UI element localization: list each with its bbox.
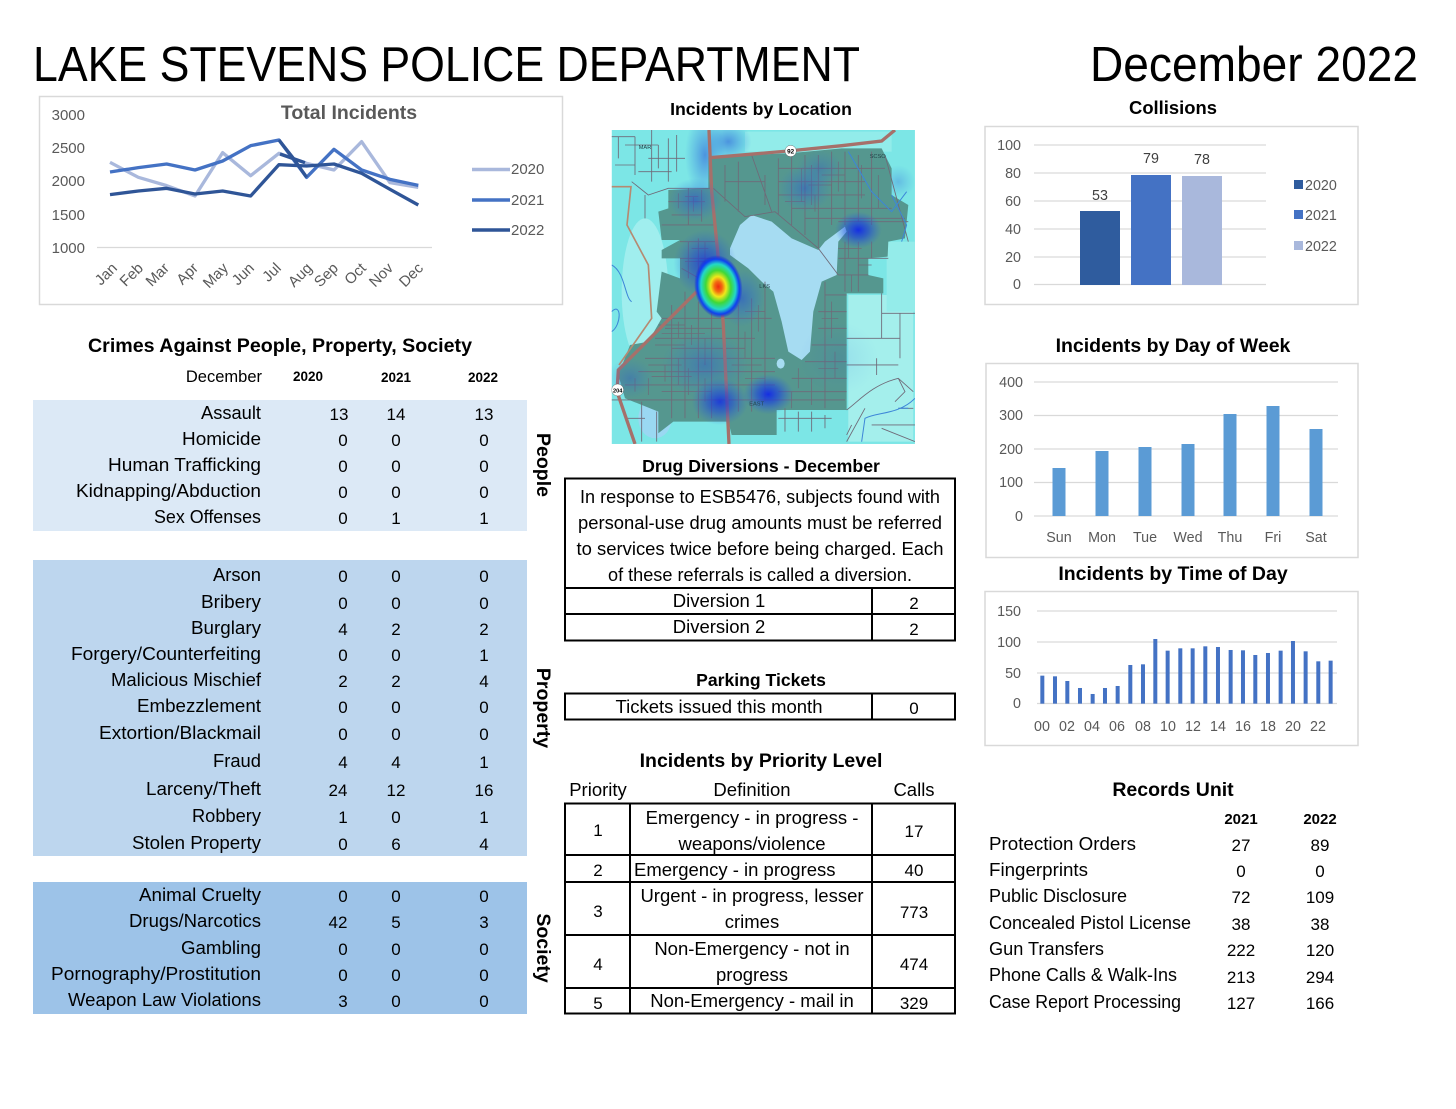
panel: crimes against property: 0	[479, 725, 489, 744]
side label: People: People	[532, 433, 554, 497]
panel: crimes against property: 4	[338, 753, 348, 772]
table: parking tickets: 0	[909, 699, 919, 718]
panel: crimes against property: 16	[475, 781, 493, 800]
bar chart: day of week: Tue	[1133, 530, 1157, 546]
panel: crimes against people: 0	[391, 483, 401, 502]
line chart: total incidents: Nov	[366, 259, 397, 291]
table: records unit: 294	[1306, 968, 1334, 987]
line chart: total incidents: Aug	[285, 260, 316, 291]
bar chart: collisions: 0	[1013, 277, 1021, 293]
panel: crimes against property: 0	[391, 698, 401, 717]
panel: crimes against society: Animal Cruelty	[139, 884, 262, 905]
panel: crimes against society: 0	[338, 966, 348, 985]
panel: crimes against society: 3	[338, 992, 348, 1011]
map: labels: LKS	[759, 284, 770, 290]
line chart: total incidents: 2020	[511, 161, 544, 178]
bar chart: day of week: Thu	[1218, 530, 1242, 546]
table: priority levels: crimes	[725, 911, 779, 932]
table: priority levels: Emergency - in progress -	[646, 807, 858, 828]
panel: crimes against property: 0	[391, 646, 401, 665]
panel: crimes against people: 0	[338, 431, 348, 450]
bar chart: time of day: 10	[1160, 719, 1176, 735]
table: records unit: 2022	[1303, 811, 1337, 828]
heading: collisions: Collisions	[1129, 97, 1217, 118]
table: priority levels: 5	[593, 994, 603, 1013]
panel: crimes against property: Arson	[213, 564, 261, 585]
bar chart: collisions: 53	[1092, 188, 1108, 204]
heat map of incidents	[607, 112, 915, 444]
bar chart: day of week: Mon	[1088, 530, 1116, 546]
crimes table column headers: 2021	[381, 370, 412, 385]
panel: crimes against society: 0	[338, 940, 348, 959]
table: priority levels: Non-Emergency - mail in	[650, 990, 854, 1011]
panel: crimes against people: 1	[391, 509, 401, 528]
line chart: total incidents: Jul	[259, 260, 285, 285]
table: records unit	[989, 811, 1337, 1013]
bar chart: time of day: 08	[1135, 719, 1151, 735]
bar chart: time of day: 22	[1310, 719, 1326, 735]
bar chart: day of week: 100	[999, 475, 1023, 491]
table: records unit: 0	[1315, 862, 1325, 881]
line chart: total incidents: Feb	[117, 260, 147, 290]
line chart: total incidents: 1500	[52, 207, 85, 224]
bar chart: collisions: 100	[997, 138, 1021, 154]
table: priority levels: Calls	[893, 779, 935, 800]
bar chart: day of week: 300	[999, 408, 1023, 424]
panel: crimes against property: 4	[479, 672, 489, 691]
bar chart: time of day: 16	[1235, 719, 1251, 735]
table: priority levels: Priority	[569, 779, 628, 800]
panel: crimes against property: Extortion/Blackmail	[99, 722, 261, 743]
panel: crimes against property: 0	[391, 594, 401, 613]
panel: crimes against property: 0	[479, 594, 489, 613]
crimes table column headers: December	[186, 368, 262, 386]
bar chart: collisions: 79	[1143, 151, 1159, 167]
panel: crimes against property	[33, 560, 527, 856]
table: records unit: Fingerprints	[989, 859, 1088, 880]
table: priority levels: 17	[905, 822, 923, 841]
table: priority levels	[565, 779, 955, 1014]
bar chart: time of day: 00	[1034, 719, 1050, 735]
line chart: total incidents: 2500	[52, 140, 85, 157]
side label: Society: Society	[532, 913, 554, 983]
table: drug diversions: of these referrals is called a diversion.	[608, 564, 912, 585]
line chart: total incidents: 3000	[52, 107, 85, 124]
panel: crimes against people: 0	[479, 457, 489, 476]
panel: crimes against property: Larceny/Theft	[146, 778, 261, 799]
table: priority levels: Definition	[713, 779, 791, 800]
panel: crimes against property: 1	[479, 808, 489, 827]
line chart: total incidents: 2000	[52, 173, 85, 190]
bar chart: collisions: 2020	[1305, 178, 1337, 194]
table: records unit: 38	[1311, 915, 1329, 934]
panel: crimes against property: 0	[479, 698, 489, 717]
panel: crimes against society: 0	[391, 992, 401, 1011]
panel: crimes against people: 14	[387, 405, 405, 424]
crimes table column headers: 2020	[293, 369, 323, 384]
bar chart: day of week: 0	[1015, 509, 1023, 525]
panel: crimes against property: 0	[391, 567, 401, 586]
line chart: total incidents: Dec	[396, 259, 427, 291]
panel: crimes against people: 0	[391, 431, 401, 450]
table: records unit: 0	[1236, 862, 1246, 881]
line chart: total incidents: Mar	[143, 260, 173, 290]
table: records unit: 109	[1306, 888, 1334, 907]
table: records unit: 166	[1306, 994, 1334, 1013]
bar chart: day of week: 200	[999, 442, 1023, 458]
table: priority levels: weapons/violence	[677, 833, 826, 854]
table: records unit: 213	[1227, 968, 1255, 987]
panel: crimes against property: Robbery	[192, 805, 262, 826]
heading: incidents by location: Incidents by Location	[670, 99, 852, 119]
panel: crimes against property: Stolen Property	[132, 832, 262, 853]
panel: crimes against property: 4	[338, 620, 348, 639]
line chart: total incidents: Sep	[311, 260, 342, 291]
panel: crimes against society: 0	[391, 887, 401, 906]
panel: crimes against property: Bribery	[201, 591, 262, 612]
bar chart: time of day: 02	[1059, 719, 1075, 735]
table: records unit: 127	[1227, 994, 1255, 1013]
bar chart: time of day: 18	[1260, 719, 1276, 735]
line chart: total incidents: Jan	[92, 260, 121, 289]
panel: crimes against property: 0	[479, 567, 489, 586]
panel: crimes against people: Homicide	[182, 428, 261, 449]
table: priority levels: 329	[900, 994, 928, 1013]
panel: crimes against society: 0	[479, 992, 489, 1011]
panel: crimes against property: 4	[391, 753, 401, 772]
table: priority levels: Emergency - in progress	[634, 859, 836, 880]
panel: crimes against people: Human Trafficking	[108, 454, 261, 475]
table: priority levels: Non-Emergency - not in	[654, 938, 850, 959]
table: records unit: 72	[1232, 888, 1250, 907]
heading: records unit: Records Unit	[1112, 779, 1234, 801]
panel: crimes against people	[33, 400, 527, 531]
bar chart: day of week: Fri	[1265, 530, 1281, 546]
table: records unit: 120	[1306, 941, 1334, 960]
map: labels: 92	[787, 148, 795, 155]
heading: incidents by time of day: Incidents by Time of Day	[1058, 563, 1288, 585]
bar chart: collisions: 40	[1005, 222, 1021, 238]
bar chart: collisions: 20	[1005, 250, 1021, 266]
line chart: total incidents: Total Incidents	[281, 102, 417, 124]
table: records unit: Phone Calls & Walk-Ins	[989, 964, 1177, 985]
panel: crimes against property: Burglary	[191, 617, 262, 638]
panel: crimes against property: 2	[391, 620, 401, 639]
table: priority levels: progress	[716, 964, 788, 985]
panel: crimes against property: 1	[338, 808, 348, 827]
panel: crimes against property: 12	[387, 781, 405, 800]
date heading: December 2022	[1090, 38, 1418, 92]
table: parking tickets: Tickets issued this month	[615, 696, 823, 717]
panel: crimes against people: Kidnapping/Abduction	[76, 480, 261, 501]
panel: crimes against property: Embezzlement	[137, 695, 261, 716]
heading: drug diversions: Drug Diversions - December	[642, 456, 880, 476]
panel: crimes against society: 0	[479, 966, 489, 985]
panel: crimes against people: Sex Offenses	[154, 506, 261, 527]
heading: incidents by priority level: Incidents by Priority Level	[640, 750, 882, 772]
bar chart: time of day: 0	[1013, 696, 1021, 712]
panel: crimes against property: 0	[338, 835, 348, 854]
panel: crimes against society: 3	[479, 913, 489, 932]
panel: crimes against property: 2	[391, 672, 401, 691]
table: records unit: 2021	[1224, 811, 1258, 828]
panel: crimes against people: 0	[479, 431, 489, 450]
panel: crimes against property: 1	[479, 753, 489, 772]
panel: crimes against property: 0	[338, 594, 348, 613]
panel: crimes against property: 6	[391, 835, 401, 854]
table: priority levels: 2	[593, 861, 603, 880]
table: priority levels: Urgent - in progress, lesser	[640, 885, 864, 906]
bar chart: time of day: 150	[997, 604, 1021, 620]
map: labels: EAST	[749, 402, 765, 408]
table: priority levels: 3	[593, 902, 603, 921]
table: drug diversions	[565, 478, 955, 640]
panel: crimes against property: 4	[479, 835, 489, 854]
bar chart: time of day: 14	[1210, 719, 1226, 735]
panel: crimes against society	[33, 882, 527, 1014]
bar chart: time of day: 12	[1185, 719, 1201, 735]
line chart: total incidents: May	[200, 259, 232, 292]
bar chart: time of day	[985, 592, 1358, 746]
bar chart: time of day: 20	[1285, 719, 1301, 735]
panel: crimes against society: Weapon Law Violations	[68, 989, 261, 1010]
table: parking tickets	[565, 693, 955, 720]
heading: incidents by day of week: Incidents by Day of Week	[1056, 335, 1291, 357]
map: labels: SCSO	[870, 154, 886, 160]
bar chart: time of day: 04	[1084, 719, 1100, 735]
table: records unit: Gun Transfers	[989, 938, 1104, 959]
map: street network	[612, 130, 915, 444]
table: drug diversions: 2	[909, 620, 919, 639]
bar chart: collisions: 80	[1005, 166, 1021, 182]
panel: crimes against property: 0	[338, 698, 348, 717]
panel: crimes against property: 0	[391, 808, 401, 827]
map: labels: MAR	[639, 145, 651, 151]
bar chart: time of day: 50	[1005, 666, 1021, 682]
table: records unit: 38	[1232, 915, 1250, 934]
bar chart: collisions: 60	[1005, 194, 1021, 210]
bar chart: time of day: 100	[997, 635, 1021, 651]
panel: crimes against people: 13	[475, 405, 493, 424]
table: records unit: 27	[1232, 836, 1250, 855]
panel: crimes against people: 0	[391, 457, 401, 476]
panel: crimes against property: 0	[338, 646, 348, 665]
table: records unit: Concealed Pistol License	[989, 912, 1191, 933]
line chart: total incidents: Oct	[341, 259, 370, 288]
panel: crimes against property: Fraud	[213, 750, 261, 771]
table: drug diversions: to services twice before being charged. Each	[576, 538, 944, 559]
table: drug diversions: Diversion 1	[673, 590, 765, 611]
table: drug diversions: Diversion 2	[673, 616, 765, 637]
bar chart: day of week: Sun	[1046, 530, 1072, 546]
line chart: total incidents	[40, 96, 562, 304]
side label: Property: Property	[532, 668, 554, 748]
bar chart: day of week	[986, 364, 1358, 558]
panel: crimes against society: Pornography/Prostitution	[51, 963, 261, 984]
panel: crimes against society: 0	[338, 887, 348, 906]
table: drug diversions: personal-use drug amounts must be referred	[578, 512, 942, 533]
panel: crimes against property: Forgery/Counterfeiting	[71, 643, 261, 664]
panel: crimes against people: 1	[479, 509, 489, 528]
crimes table column headers	[186, 368, 498, 386]
table: priority levels: 1	[593, 821, 603, 840]
panel: crimes against society: Drugs/Narcotics	[129, 910, 261, 931]
panel: crimes against people: 0	[338, 483, 348, 502]
table: records unit: Case Report Processing	[989, 991, 1181, 1012]
table: records unit: 222	[1227, 941, 1255, 960]
line chart: total incidents: Jun	[229, 260, 258, 289]
bar chart: collisions	[985, 126, 1358, 304]
panel: crimes against people: 13	[330, 405, 348, 424]
panel: crimes against society: 0	[479, 940, 489, 959]
panel: crimes against society: Gambling	[181, 937, 261, 958]
panel: crimes against property: 2	[338, 672, 348, 691]
line chart: total incidents: 2022	[511, 222, 544, 239]
bar chart: day of week: 400	[999, 375, 1023, 391]
title: LAKE STEVENS POLICE DEPARTMENT	[33, 38, 860, 92]
panel: crimes against people: Assault	[201, 402, 261, 423]
panel: crimes against property: 24	[329, 781, 347, 800]
line chart: total incidents: Apr	[173, 260, 202, 288]
panel: crimes against property: 0	[391, 725, 401, 744]
map: labels: 204	[613, 388, 623, 394]
table: records unit: 89	[1311, 836, 1329, 855]
heading: parking tickets: Parking Tickets	[696, 670, 826, 690]
table: priority levels: 474	[900, 955, 928, 974]
panel: crimes against people: 0	[479, 483, 489, 502]
table: records unit: Public Disclosure	[989, 885, 1127, 906]
table: priority levels: 4	[593, 955, 603, 974]
table: priority levels: 40	[905, 861, 923, 880]
bar chart: day of week: Sat	[1305, 530, 1327, 546]
panel: crimes against property: 1	[479, 646, 489, 665]
table: drug diversions: In response to ESB5476, subjects found with	[580, 486, 940, 507]
line chart: total incidents: 2021	[511, 192, 544, 209]
panel: crimes against property: 0	[338, 567, 348, 586]
table: records unit: Protection Orders	[989, 833, 1136, 854]
table: drug diversions: 2	[909, 594, 919, 613]
panel: crimes against property: 2	[479, 620, 489, 639]
table: priority levels: 773	[900, 903, 928, 922]
panel: crimes against people: 0	[338, 457, 348, 476]
panel: crimes against people: 0	[338, 509, 348, 528]
panel: crimes against society: 0	[479, 887, 489, 906]
bar chart: collisions: 78	[1194, 152, 1210, 168]
bar chart: collisions: 2022	[1305, 239, 1337, 255]
panel: crimes against property: Malicious Mischief	[111, 669, 262, 690]
bar chart: time of day: 06	[1109, 719, 1125, 735]
panel: crimes against society: 0	[391, 966, 401, 985]
map: labels	[612, 145, 886, 408]
panel: crimes against society: 42	[329, 913, 347, 932]
bar chart: day of week: Wed	[1173, 530, 1203, 546]
panel: crimes against society: 5	[391, 913, 401, 932]
panel: crimes against property: 0	[338, 725, 348, 744]
heading: crimes against people, property, society: Crimes Against People, Property, Society	[88, 335, 472, 357]
panel: crimes against society: 0	[391, 940, 401, 959]
crimes table column headers: 2022	[468, 370, 498, 385]
bar chart: collisions: 2021	[1305, 208, 1337, 224]
line chart: total incidents: 1000	[52, 240, 85, 257]
